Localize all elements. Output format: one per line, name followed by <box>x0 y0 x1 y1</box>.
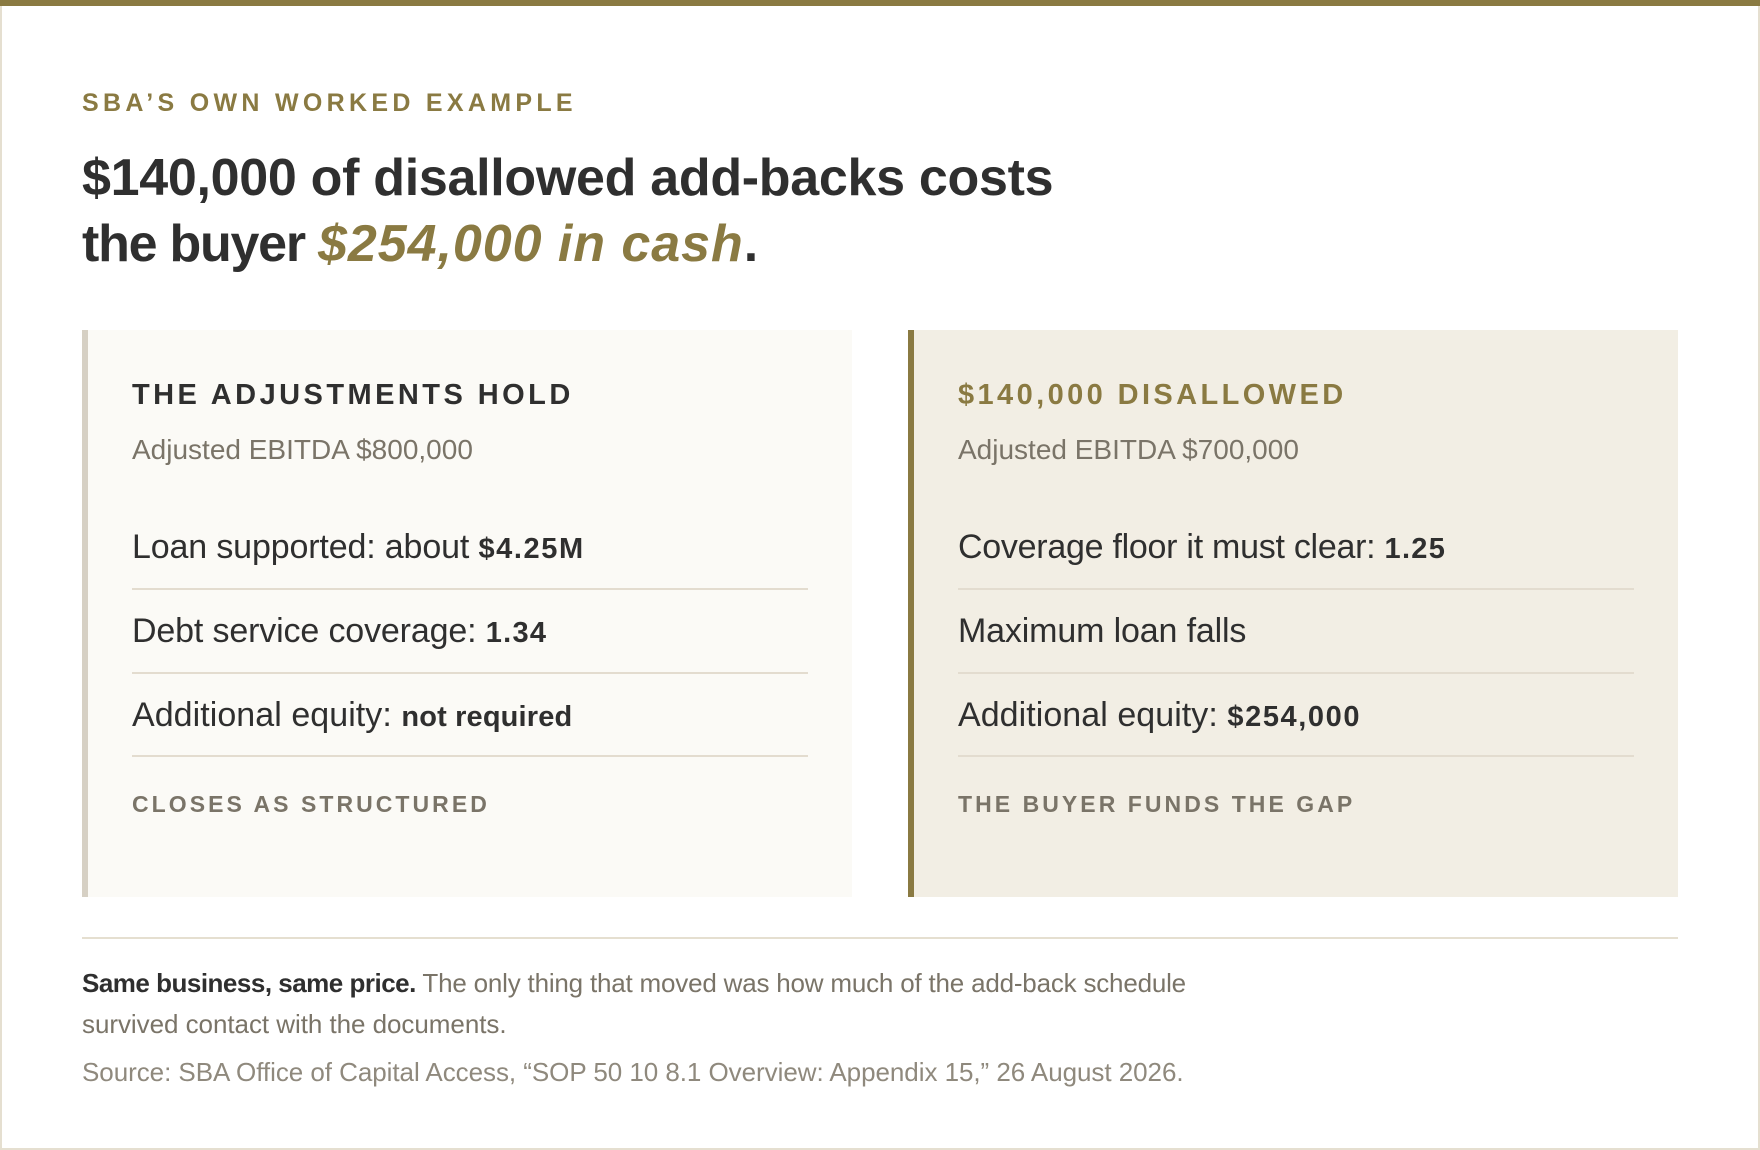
panel: adjustments hold <box>82 330 852 897</box>
note <box>82 968 1186 1039</box>
row: additional equity: Additional equity: not required <box>132 696 572 734</box>
panel heading: THE ADJUSTMENTS HOLD <box>132 379 574 411</box>
row: debt service coverage: Debt service coverage: 1.34 <box>132 612 547 650</box>
note: Same business, same price. The only thing that moved was how much of the add-back schedule <box>82 968 1186 998</box>
row: coverage floor: Coverage floor it must clear: 1.25 <box>958 528 1446 566</box>
row: maximum loan: Maximum loan falls <box>958 612 1246 650</box>
outcome: THE BUYER FUNDS THE GAP <box>958 791 1355 817</box>
title <box>82 149 1053 273</box>
adjusted EBITDA: Adjusted EBITDA $700,000 <box>958 434 1299 465</box>
source: Source: SBA Office of Capital Access, “SOP 50 10 8.1 Overview: Appendix 15,” 26 August 2026. <box>82 1057 1184 1087</box>
title: the buyer $254,000 in cash. <box>82 215 758 273</box>
eyebrow: SBA’S OWN WORKED EXAMPLE <box>82 89 577 117</box>
title: $140,000 of disallowed add-backs costs <box>82 149 1053 207</box>
panel: disallowed <box>908 330 1678 897</box>
top accent bar <box>0 0 1760 6</box>
row: additional equity: Additional equity: $254,000 <box>958 696 1361 734</box>
adjusted EBITDA: Adjusted EBITDA $800,000 <box>132 434 473 465</box>
row: loan supported: Loan supported: about $4.25M <box>132 528 585 566</box>
panel heading: $140,000 DISALLOWED <box>958 379 1347 411</box>
note: survived contact with the documents. <box>82 1009 507 1039</box>
outcome: CLOSES AS STRUCTURED <box>132 791 490 817</box>
